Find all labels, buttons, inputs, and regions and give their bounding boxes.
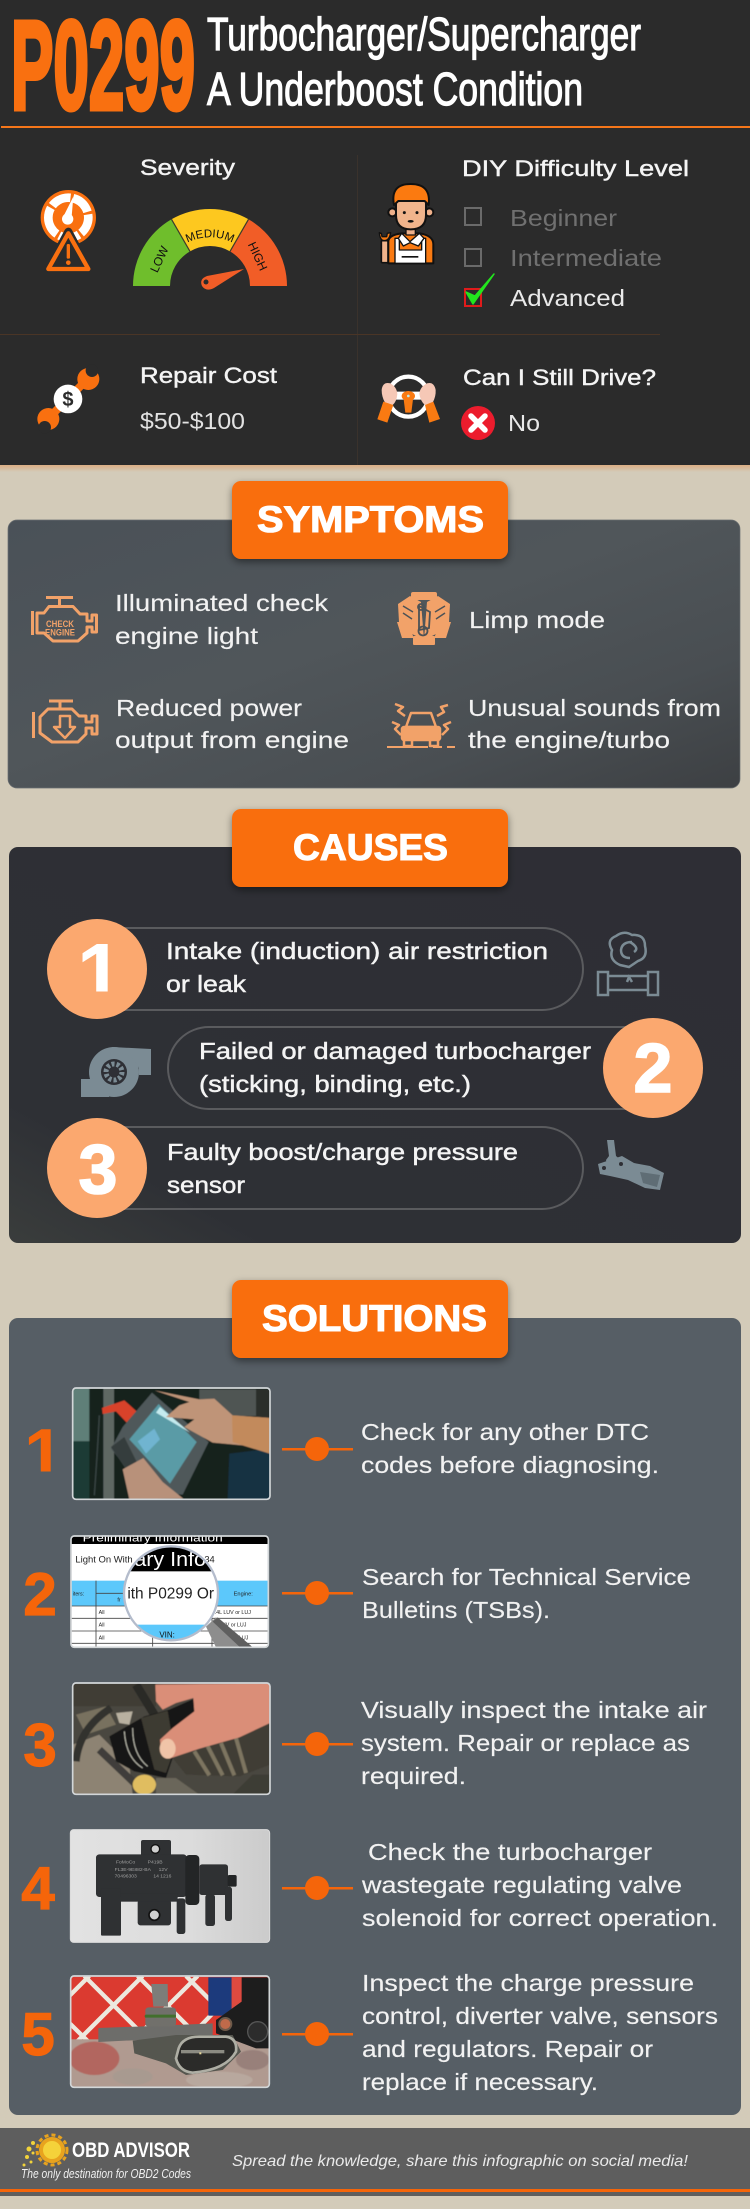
photo: TSB document under magnifier: All (99, 1623, 105, 1629)
text: symptom 1: engine light (115, 623, 259, 649)
text: symptom 3: Reduced power (116, 695, 302, 721)
heading: symptoms: SYMPTOMS (257, 499, 484, 540)
icon: wrench with dollar (37, 364, 99, 434)
heading: can I still drive: Can I Still Drive? (463, 365, 656, 390)
icon: turbocharger (81, 1047, 151, 1097)
text: cause 3 (167, 1139, 518, 1198)
text: cause 1 (166, 938, 548, 997)
number 3: 3 (23, 1712, 57, 1779)
text: step 4: solenoid for correct operation. (362, 1905, 718, 1931)
text: symptom 1: Illuminated check (115, 590, 329, 616)
connector 4 (282, 1876, 353, 1900)
panel: header (0, 0, 750, 471)
icon: red no cross (461, 406, 495, 440)
text: step 3: system. Repair or replace as (361, 1730, 690, 1756)
heading: solutions (232, 1280, 508, 1358)
photo: TSB document under magnifier: .4L LUV or LUJ (215, 1610, 251, 1616)
badge: 1: 1 (77, 926, 123, 1019)
text: step 1: Check for any other DTC (361, 1419, 649, 1445)
heading: solutions: SOLUTIONS (262, 1298, 487, 1339)
photo: TSB document under magnifier: or LUJ (233, 1635, 249, 1641)
text: symptom 4 (468, 695, 721, 753)
number 2: 2 (23, 1561, 57, 1628)
step 3 (23, 1683, 707, 1795)
text: step 2 (362, 1564, 691, 1623)
photo: TSB document under magnifier: L LUV or LUJ (215, 1623, 247, 1629)
icon: reduced power engine (34, 701, 97, 742)
text: step 5: control, diverter valve, sensors (362, 2003, 718, 2029)
photo: wastegate solenoid: FL3E-9E882-BA (115, 1867, 152, 1873)
heading: causes (232, 809, 508, 887)
text: step 1: codes before diagnosing. (361, 1452, 659, 1478)
heading: causes: CAUSES (293, 827, 448, 868)
connector 3 (282, 1732, 353, 1756)
badge: 3: 3 (79, 1130, 117, 1208)
step 4 (21, 1830, 718, 1942)
icon: pressure sensor (598, 1140, 664, 1190)
checklist: difficulty: Intermediate (510, 245, 662, 271)
title: description (207, 8, 641, 115)
gauge: severity low medium high: LOW (147, 243, 172, 275)
panel: causes (9, 809, 741, 1243)
photo: scan tool (73, 1388, 270, 1499)
icon: check engine: CHECK (46, 619, 74, 630)
number 1: 1 (24, 1415, 64, 1495)
gauge: severity low medium high: MEDIUM (185, 230, 234, 242)
number 4: 4 (21, 1855, 55, 1922)
photo: intake hose (73, 1683, 270, 1795)
photo: wastegate solenoid: 12V (159, 1867, 168, 1873)
number 5: 5 (21, 2001, 55, 2068)
icon: smoke and pipe (598, 933, 658, 995)
text: step 3 (361, 1697, 707, 1789)
photo: charge pressure sensor (70, 1975, 270, 2088)
heading: symptoms (232, 481, 508, 559)
text: cause 3: Faulty boost/charge pressure (167, 1139, 518, 1165)
connector 5 (282, 2022, 353, 2046)
text: step 4: Check the turbocharger (368, 1839, 652, 1865)
photo: wastegate solenoid (70, 1830, 270, 1942)
text: symptom 3 (115, 695, 349, 753)
icon: green check (466, 274, 494, 304)
heading: repair cost: Repair Cost (140, 363, 277, 388)
photo: TSB document under magnifier: Preliminary Information (83, 1532, 223, 1544)
text: step 5: Inspect the charge pressure (362, 1970, 694, 1996)
logo: OBD Advisor: The only destination for OBD2 Codes (21, 2167, 191, 2181)
icon: wrench with dollar: $ (62, 389, 74, 411)
text: cause 2: Failed or damaged turbocharger (199, 1038, 591, 1064)
text: symptom 4: Unusual sounds from (468, 695, 721, 721)
text: step 1 (361, 1419, 659, 1478)
icon: check engine (32, 598, 96, 641)
text: step 5 (362, 1970, 718, 2095)
text: cause 2: (sticking, binding, etc.) (199, 1071, 471, 1097)
text: step 2: Bulletins (TSBs). (362, 1597, 550, 1623)
cause 2 (81, 1018, 703, 1118)
text: step 4: wastegate regulating valve (361, 1872, 682, 1898)
icon: severity gauge with warning (41, 190, 96, 269)
heading: severity: Severity (140, 155, 235, 180)
icon: engine limp mode (397, 592, 451, 645)
photo: TSB document under magnifier: VIN: (159, 1630, 175, 1639)
text: symptom 4: the engine/turbo (468, 727, 670, 753)
text: step 3: required. (361, 1763, 466, 1789)
text: symptom 2: Limp mode (469, 607, 605, 633)
photo: wastegate solenoid: 14 1216 (153, 1874, 172, 1880)
photo: TSB document under magnifier (71, 1532, 268, 1647)
photo: TSB document under magnifier: ith P0299 Or (127, 1585, 215, 1602)
photo: TSB document under magnifier: iters: (73, 1591, 84, 1597)
text: symptom 1 (115, 590, 329, 649)
photo: TSB document under magnifier: All (99, 1610, 105, 1616)
title: description: A Underboost Condition (207, 63, 583, 115)
logo: OBD Advisor (21, 2135, 191, 2181)
value: can drive: No (508, 410, 540, 436)
text: symptom 3: output from engine (115, 727, 349, 753)
text: step 4 (361, 1839, 718, 1931)
text: step 5: and regulators. Repair or (362, 2036, 653, 2062)
gauge: severity low medium high: HIGH (245, 240, 270, 273)
cause 1 (47, 919, 658, 1019)
panel: solutions (9, 1280, 741, 2115)
icon: car with noises (387, 704, 455, 747)
icon: check engine: ENGINE (45, 628, 75, 638)
photo: TSB document under magnifier: fr (117, 1597, 121, 1603)
connector 1 (282, 1437, 353, 1461)
step 1 (24, 1388, 659, 1499)
photo: TSB document under magnifier: All (99, 1635, 105, 1641)
checklist: difficulty: Beginner (510, 205, 617, 231)
gauge: severity low medium high (133, 209, 287, 290)
checklist: difficulty (465, 205, 662, 311)
icon: steering wheel (377, 377, 440, 423)
text: step 3: Visually inspect the intake air (361, 1697, 707, 1723)
badge: 2: 2 (634, 1029, 672, 1107)
photo: wastegate solenoid: FoMoCo (116, 1860, 135, 1866)
photo: TSB document under magnifier: Engine: (234, 1591, 253, 1597)
text: cause 1: or leak (166, 971, 247, 997)
connector 2 (282, 1581, 353, 1605)
text: step 5: replace if necessary. (362, 2069, 598, 2095)
badge: 2 (603, 1018, 703, 1118)
text: call to action: Spread the knowledge, share this infographic on social media! (232, 2153, 689, 2170)
text: step 2: Search for Technical Service (362, 1564, 691, 1590)
photo: TSB document under magnifier: 34 (204, 1554, 215, 1564)
step 2 (23, 1532, 691, 1647)
icon: mechanic (379, 184, 433, 263)
cause 3 (47, 1118, 664, 1218)
value: repair cost: $50-$100 (140, 408, 245, 434)
checklist: difficulty: Advanced (510, 285, 625, 311)
photo: TSB document under magnifier: ary Info (134, 1548, 206, 1571)
text: cause 2 (199, 1038, 591, 1097)
badge: 1 (47, 919, 147, 1019)
photo: wastegate solenoid: P419B (148, 1860, 163, 1866)
panel: symptoms (8, 481, 740, 788)
text: cause 3: sensor (167, 1172, 245, 1198)
photo: wastegate solenoid: 70496303 (115, 1874, 137, 1880)
step 5 (21, 1970, 718, 2095)
photo: TSB document under magnifier: Light On With (75, 1554, 133, 1564)
badge: 3 (47, 1118, 147, 1218)
heading: DIY difficulty: DIY Difficulty Level (462, 156, 689, 181)
text: cause 1: Intake (induction) air restriction (166, 938, 548, 964)
logo: OBD Advisor: OBD ADVISOR (72, 2139, 190, 2162)
footer bar (0, 2128, 750, 2196)
